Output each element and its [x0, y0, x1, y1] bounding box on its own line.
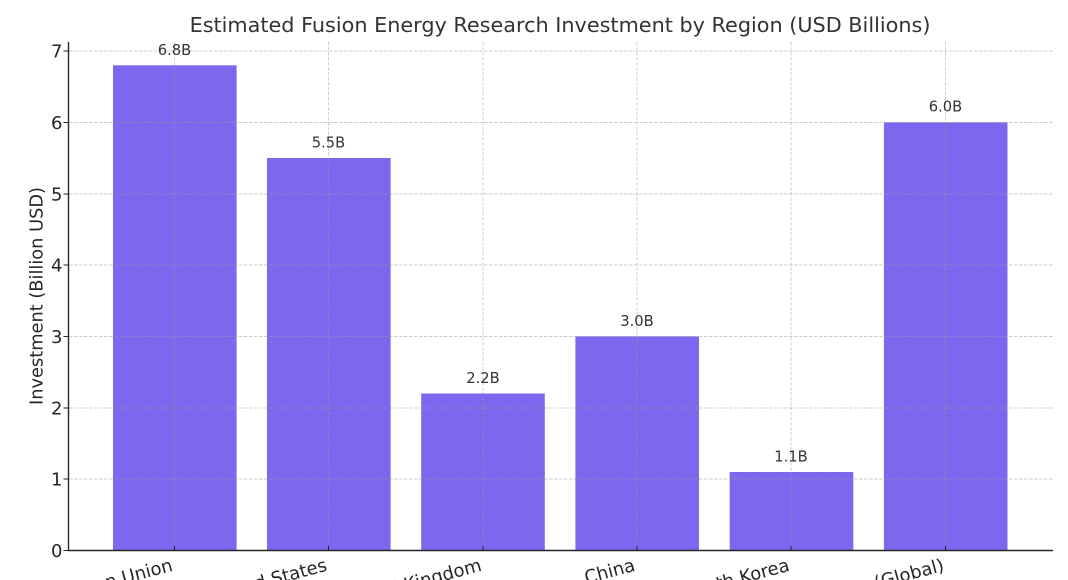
- value labels: 3.0B: [620, 313, 654, 330]
- bar: South Korea: [730, 472, 853, 550]
- bar: China: [575, 336, 699, 550]
- title: Estimated Fusion Energy Research Investment by Region (USD Billions): [190, 13, 930, 37]
- value labels: 2.2B: [466, 370, 500, 387]
- y axis tick labels: 4: [51, 256, 62, 276]
- bar: Private Sector (Global): [884, 122, 1008, 551]
- bar: United States: [267, 158, 391, 550]
- y axis tick labels: 1: [51, 470, 62, 490]
- bar: European Union: [113, 65, 237, 551]
- y axis tick labels: 2: [51, 398, 62, 420]
- y axis title: Investment (Billion USD): [26, 187, 48, 405]
- y axis tick labels: [51, 42, 62, 562]
- value labels: 6.0B: [929, 98, 962, 116]
- y axis tick labels: 5: [51, 184, 62, 206]
- bars: [113, 65, 1008, 551]
- value labels: 1.1B: [774, 448, 808, 466]
- bar: United Kingdom: [421, 394, 545, 550]
- y axis tick labels: 6: [51, 113, 62, 134]
- y axis tick labels: 0: [51, 541, 62, 562]
- x axis category labels: [31, 555, 946, 580]
- value labels: 6.8B: [158, 42, 191, 59]
- y axis tick labels: 7: [51, 42, 62, 62]
- y axis tick labels: 3: [51, 327, 62, 348]
- value labels: [158, 42, 962, 466]
- value labels: 5.5B: [312, 134, 345, 152]
